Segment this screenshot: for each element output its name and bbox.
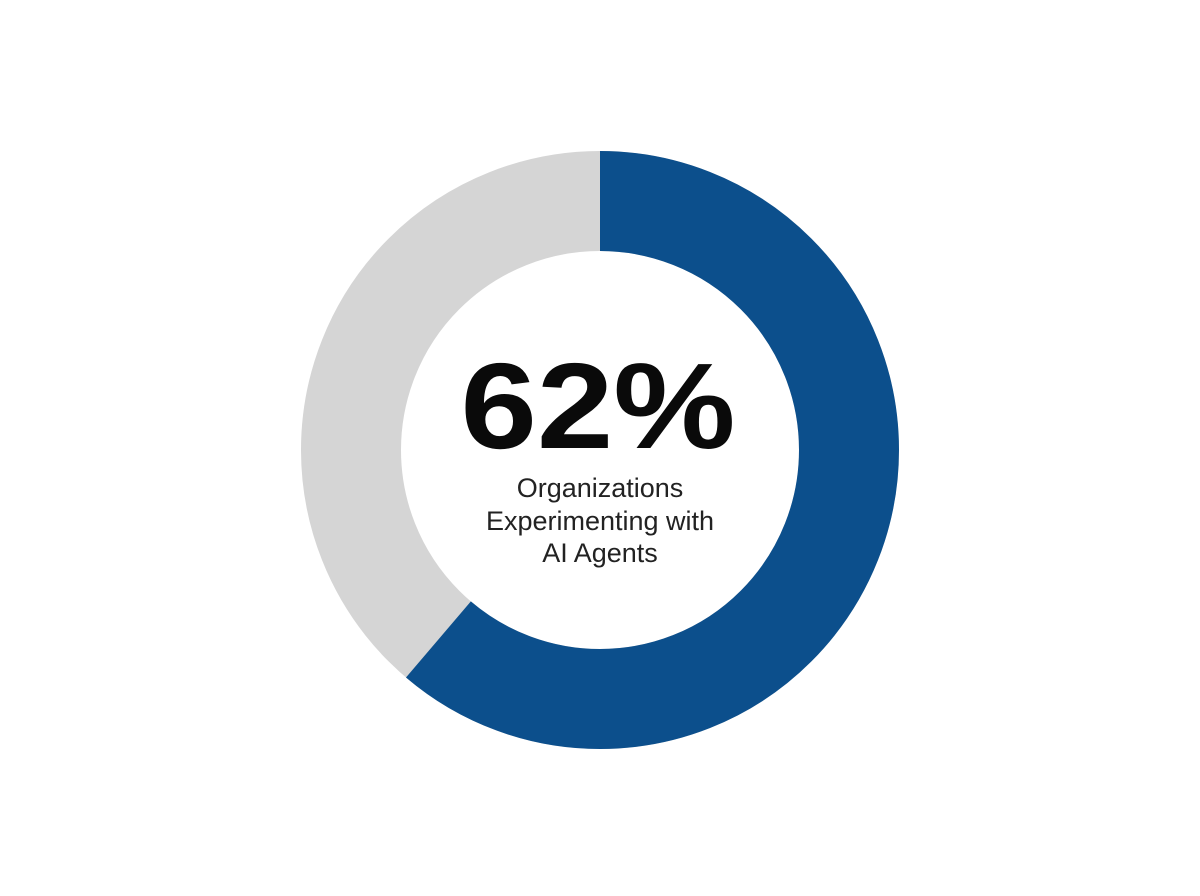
center text: percentage: 62% [460,338,736,474]
center text: label [486,473,714,568]
center text: label: Experimenting with [486,506,714,536]
ring: remaining share (grey) [351,201,849,699]
ring: 62% share (blue) [351,201,849,699]
center text: label: AI Agents [542,538,658,568]
center text: label: Organizations [517,473,683,503]
